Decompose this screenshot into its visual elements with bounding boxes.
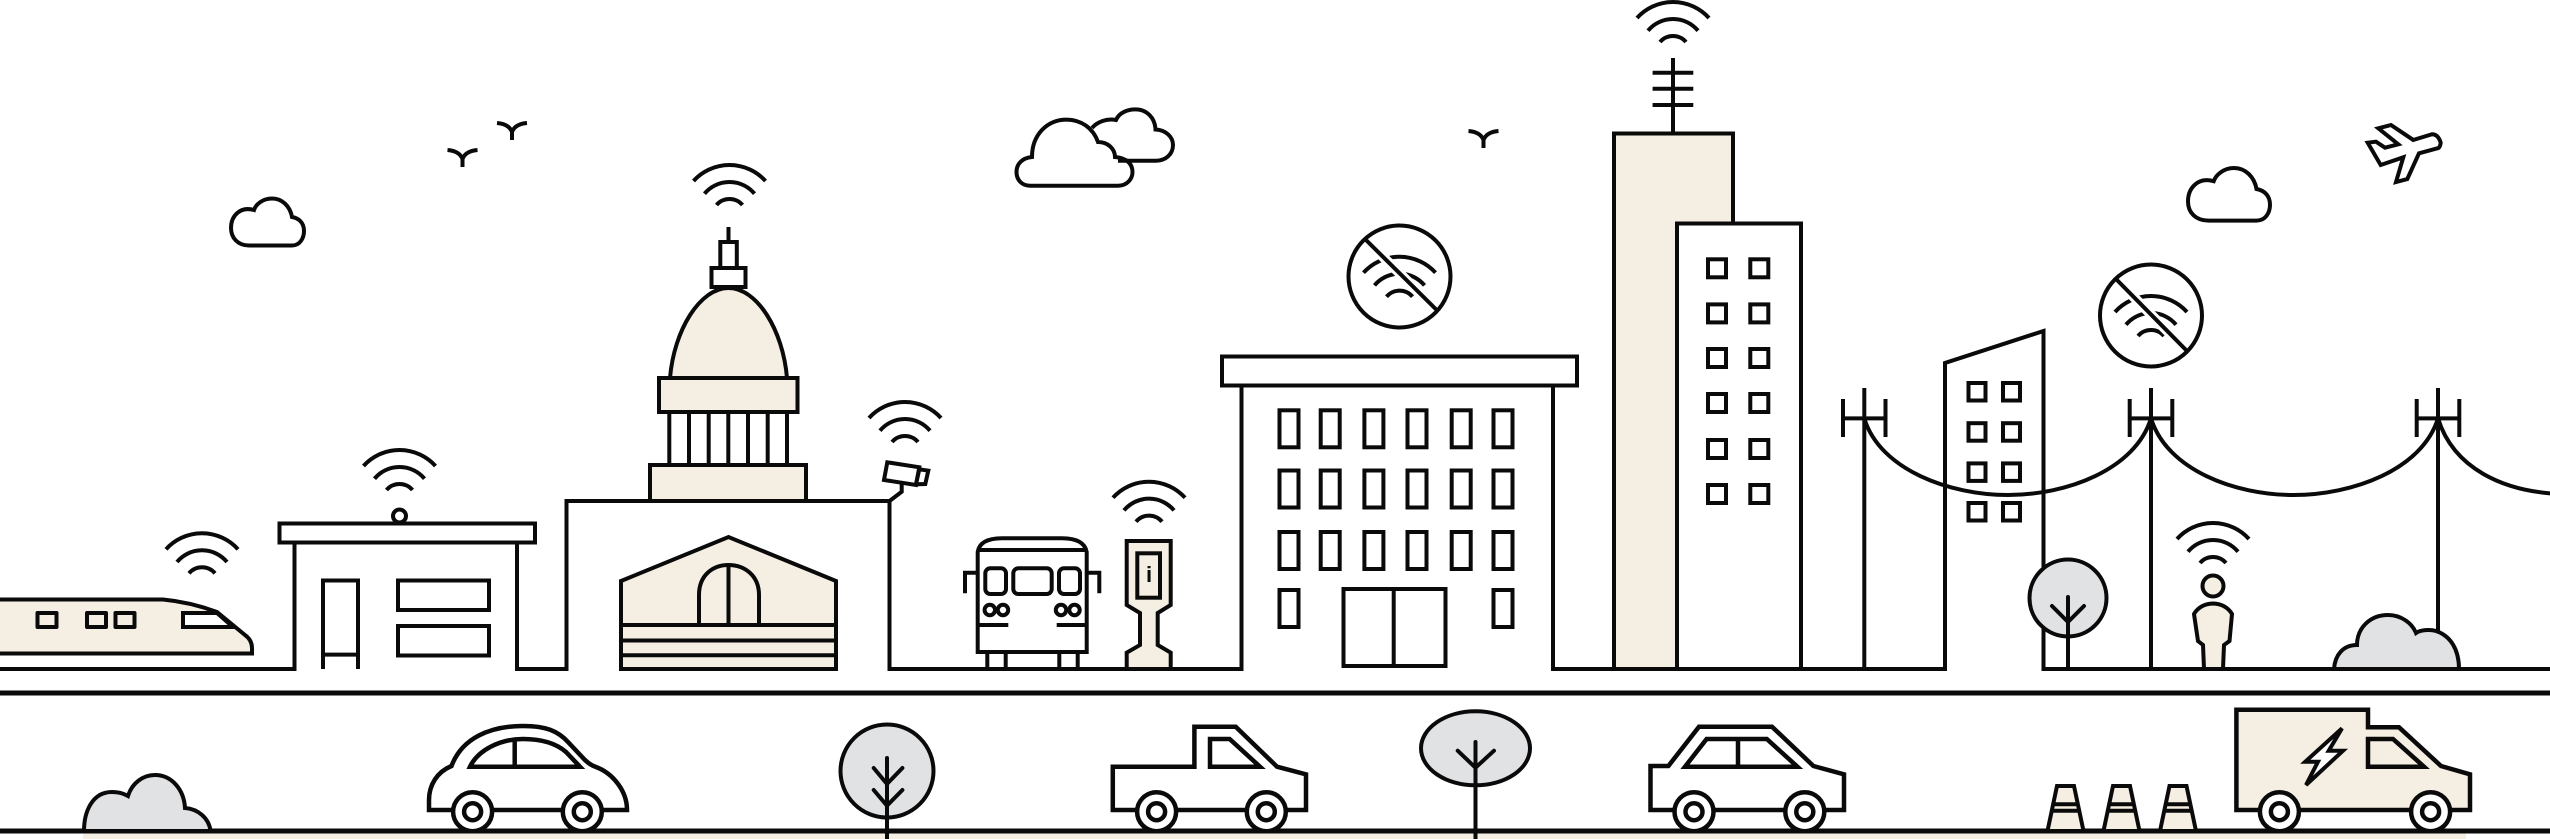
person (2194, 576, 2232, 669)
shop building (280, 510, 535, 669)
office building (1222, 356, 1577, 666)
tree: wide oval (1421, 711, 1530, 839)
cream strip along bottom edge (83, 832, 2466, 839)
tree: round with two branch pairs (840, 724, 934, 839)
info kiosk (1127, 541, 1171, 669)
utility poles and wires (1843, 388, 2550, 669)
second road line (0, 690, 2550, 696)
capitol gable entrance (621, 537, 836, 669)
bird: middle (497, 123, 527, 140)
leaning building windows (1968, 383, 2020, 520)
skyline ground outline (0, 331, 2550, 669)
capitol dome (650, 227, 806, 501)
electric van (2236, 710, 2470, 831)
wifi: shop (364, 450, 436, 490)
tall tower (1614, 134, 1733, 669)
pickup truck (1113, 727, 1306, 831)
no wifi sign: office (1348, 226, 1450, 328)
bottom road line (0, 828, 2550, 834)
wifi: train (166, 533, 238, 573)
wifi: camera (869, 402, 941, 442)
bird: left (448, 150, 478, 167)
cloud: double centre (1016, 109, 1173, 186)
sedan car (1650, 727, 1844, 831)
cloud: small left (231, 198, 304, 246)
traffic cones (2048, 786, 2196, 831)
car: beetle (429, 726, 627, 831)
cloud: right (2188, 168, 2270, 221)
train (0, 600, 252, 654)
tree: by leaning building (2030, 560, 2106, 669)
bus (965, 538, 1099, 669)
wifi: tower (1637, 2, 1709, 42)
bush: upper right (2334, 615, 2459, 669)
airplane (2368, 125, 2441, 182)
no wifi sign: poles (2100, 264, 2202, 366)
wifi: capitol (694, 165, 766, 205)
front tower building (1677, 224, 1801, 669)
tower antenna (1653, 58, 1693, 134)
bush: lower left (84, 775, 210, 831)
info kiosk: i (1146, 562, 1152, 587)
wifi: person (2177, 523, 2249, 563)
security camera (884, 462, 928, 501)
wifi: kiosk (1113, 482, 1185, 522)
bird: right (1468, 131, 1498, 148)
